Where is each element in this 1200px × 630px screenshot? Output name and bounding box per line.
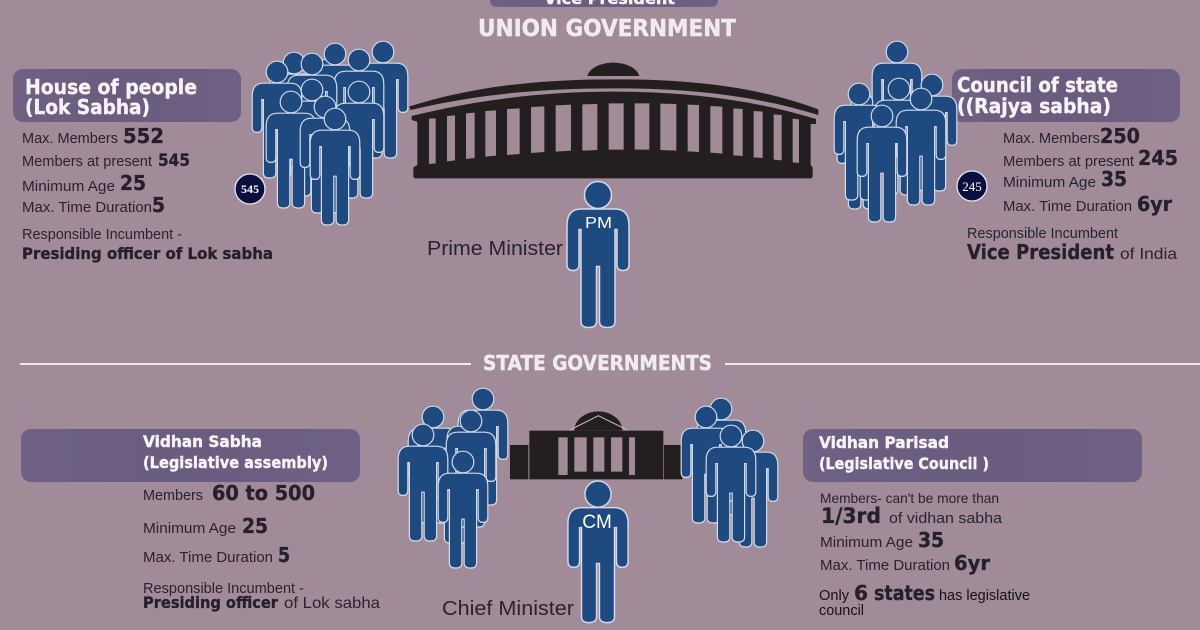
- text block: vidhan sabha facts: Responsible Incumbent -: [143, 580, 304, 597]
- text block: vidhan sabha facts: of Lok sabha: [284, 595, 380, 612]
- figure: chief minister: [568, 481, 628, 623]
- text block: rajya sabha facts: 6yr: [1137, 192, 1172, 216]
- divider: state governments right line: [725, 363, 1200, 365]
- text block: rajya sabha facts: Members at present: [1003, 153, 1135, 170]
- text block: lok sabha facts: 552: [123, 124, 164, 148]
- label: prime minister: Prime Minister: [427, 238, 563, 260]
- text block: vidhan sabha facts: 5: [278, 543, 290, 567]
- label: chief minister: Chief Minister: [442, 598, 574, 620]
- text block: vidhan sabha facts: Minimum Age: [143, 520, 236, 537]
- text block: rajya sabha facts: [967, 124, 1178, 264]
- badge: 245: 245: [962, 179, 982, 194]
- panel: vice president header: [490, 0, 718, 8]
- panel: council of state heading: [952, 69, 1180, 122]
- text block: vidhan parisad facts: 6yr: [954, 551, 990, 575]
- crowd: lok sabha members: [252, 41, 408, 225]
- panel: house of people heading: House of people: [25, 75, 197, 99]
- text block: vidhan parisad facts: Max. Time Duration: [820, 557, 950, 574]
- parliament building: [409, 63, 818, 178]
- text block: rajya sabha facts: Minimum Age: [1003, 174, 1096, 191]
- text block: vidhan sabha facts: 25: [242, 514, 268, 538]
- text block: vidhan sabha facts: Presiding officer: [143, 593, 278, 612]
- text block: rajya sabha facts: Responsible Incumbent: [967, 225, 1119, 242]
- text block: vidhan sabha facts: Members: [143, 487, 203, 504]
- text block: lok sabha facts: Members at present: [22, 153, 153, 170]
- text block: lok sabha facts: Minimum Age: [22, 178, 115, 195]
- panel: vidhan sabha heading: Vidhan Sabha: [143, 432, 262, 451]
- text block: rajya sabha facts: 245: [1138, 146, 1178, 170]
- text block: vidhan parisad facts: states: [874, 581, 935, 605]
- panel: vidhan sabha heading: (Legislative assembly): [143, 453, 328, 472]
- text block: rajya sabha facts: Max. Time Duration: [1003, 198, 1132, 215]
- text block: vidhan parisad facts: 6: [854, 581, 868, 605]
- panel: vidhan parisad heading: (Legislative Council ): [819, 454, 989, 473]
- heading: union government: UNION GOVERNMENT: [478, 16, 736, 42]
- text block: rajya sabha facts: Vice President: [967, 240, 1114, 264]
- panel: council of state heading: ((Rajya sabha): [957, 94, 1111, 118]
- text block: rajya sabha facts: Max. Members: [1003, 130, 1100, 147]
- text block: vidhan parisad facts: has legislative: [939, 587, 1030, 604]
- crowd: vidhan sabha members: [398, 388, 508, 568]
- text block: lok sabha facts: [22, 124, 273, 263]
- text block: lok sabha facts: Max. Members: [22, 130, 118, 147]
- divider: state governments left line: [20, 363, 471, 365]
- text block: vidhan parisad facts: Only: [819, 587, 849, 604]
- text block: vidhan sabha facts: 60 to 500: [212, 481, 315, 505]
- panel: house of people heading: (Lok Sabha): [25, 95, 150, 119]
- text block: vidhan parisad facts: [819, 490, 1030, 619]
- text block: rajya sabha facts: 250: [1100, 124, 1140, 148]
- panel: vidhan parisad heading: Vidhan Parisad: [819, 433, 949, 452]
- text block: vidhan parisad facts: Minimum Age: [820, 534, 913, 551]
- badge: 245: [957, 171, 987, 201]
- text block: lok sabha facts: 5: [152, 193, 165, 217]
- panel: vidhan parisad heading: [803, 429, 1142, 482]
- crowd: rajya sabha members: [834, 41, 957, 222]
- text block: vidhan parisad facts: council: [819, 602, 864, 619]
- text block: rajya sabha facts: 35: [1101, 167, 1127, 191]
- figure: chief minister: CM: [582, 512, 612, 533]
- text block: lok sabha facts: Max. Time Duration: [22, 199, 152, 216]
- figure: prime minister: [567, 182, 629, 328]
- text block: vidhan parisad facts: of vidhan sabha: [889, 510, 1003, 527]
- crowd: vidhan parisad members: [681, 398, 778, 547]
- panel: vidhan sabha heading: [21, 429, 360, 482]
- text block: lok sabha facts: Presiding officer of Lok sabha: [22, 244, 273, 263]
- panel: house of people heading: [13, 69, 241, 122]
- text block: rajya sabha facts: of India: [1120, 246, 1177, 263]
- state assembly building: [510, 411, 682, 479]
- text block: vidhan sabha facts: [143, 481, 380, 612]
- panel: council of state heading: Council of state: [957, 73, 1118, 97]
- badge: 545: [235, 174, 265, 204]
- text block: vidhan parisad facts: 35: [918, 528, 944, 552]
- text block: lok sabha facts: 25: [120, 171, 146, 195]
- badge: 545: 545: [241, 182, 259, 196]
- heading: state governments: STATE GOVERNMENTS: [483, 351, 712, 375]
- text block: vidhan parisad facts: Members- can't be more than: [820, 490, 999, 506]
- text block: vidhan parisad facts: 1/3rd: [821, 504, 881, 528]
- text block: vidhan sabha facts: Max. Time Duration: [143, 549, 273, 566]
- figure: prime minister: PM: [585, 215, 612, 232]
- text block: lok sabha facts: 545: [158, 151, 190, 171]
- text block: lok sabha facts: Responsible Incumbent -: [22, 226, 182, 243]
